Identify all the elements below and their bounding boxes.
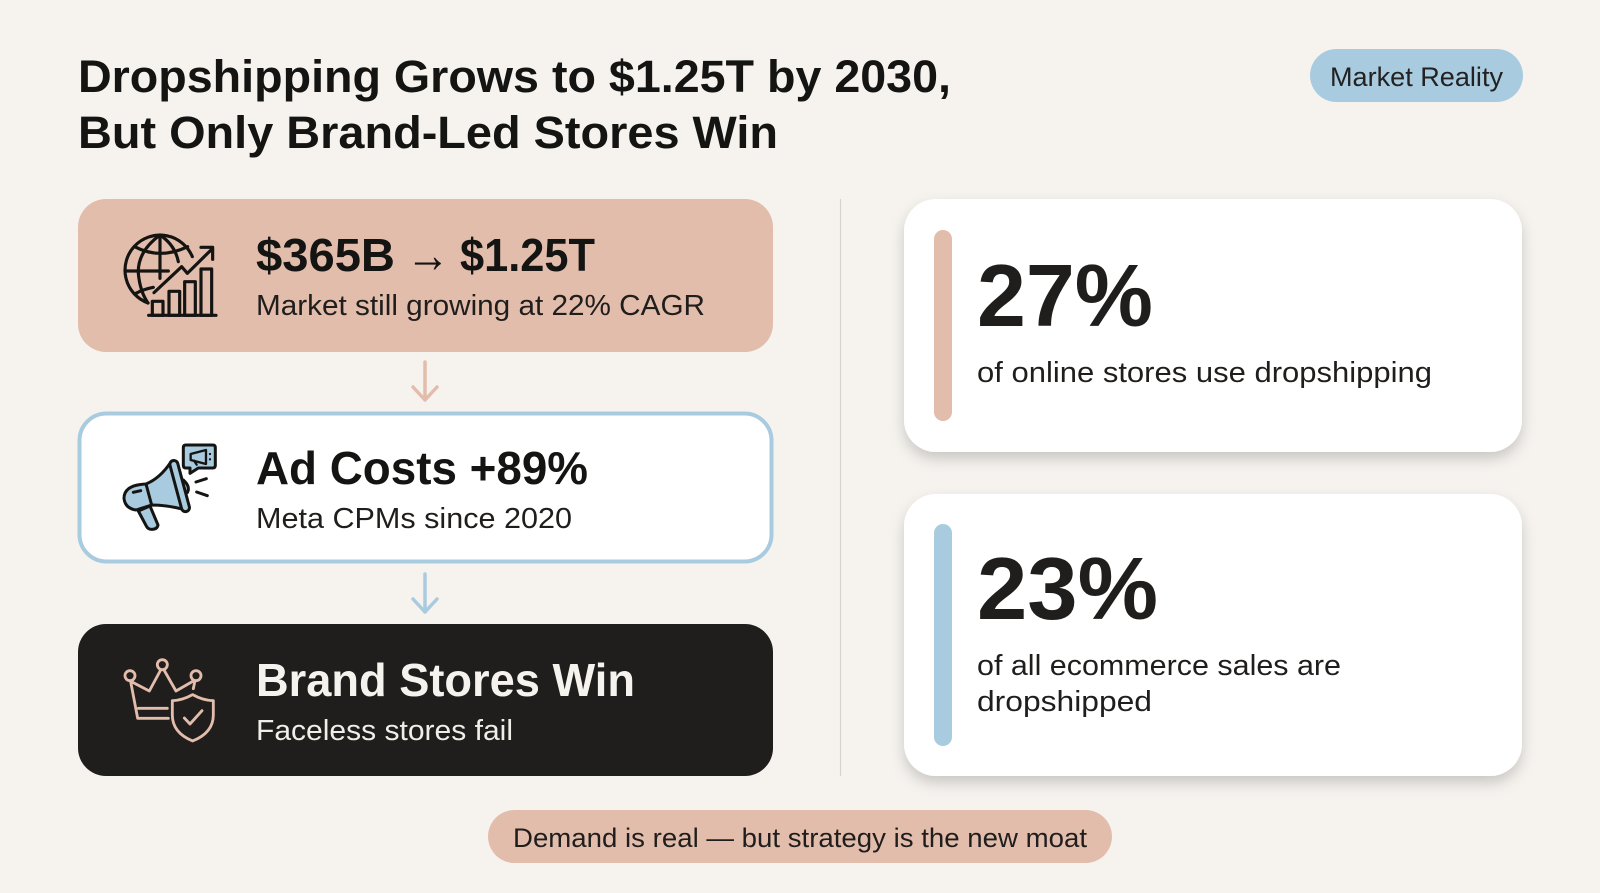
text: online stores: of online stores use dropshipping [977, 357, 1432, 389]
stat heading: market size [256, 227, 595, 283]
accent bar: peach [934, 230, 952, 421]
text: market CAGR: Market still growing at 22% CAGR [256, 290, 705, 322]
badge: market reality [1310, 49, 1523, 102]
stat heading: market size: $1.25T [460, 229, 595, 281]
arrow: blue down [413, 574, 437, 612]
stat heading: ad costs: Ad Costs +89% [256, 442, 588, 494]
icon: crown and shield [125, 660, 213, 741]
panel: market growth [78, 199, 773, 352]
text: faceless stores: Faceless stores fail [256, 715, 513, 747]
panel: brand stores win [78, 624, 773, 776]
panel: 23 percent stat [904, 494, 1522, 776]
stat number: 27%: 27% [977, 246, 1153, 345]
divider [840, 199, 842, 776]
stat heading: market size: → [406, 227, 450, 283]
stat heading: market size: $365B [256, 229, 395, 281]
icon: megaphone [124, 445, 215, 529]
callout: takeaway pill: Demand is real — but strategy is the new moat [513, 823, 1087, 853]
arrow: peach down [413, 362, 437, 400]
text: meta CPMs: Meta CPMs since 2020 [256, 503, 572, 535]
text: ecommerce sales: dropshipped [977, 686, 1152, 718]
title: Dropshipping Grows to $1.25T by 2030, [78, 51, 951, 102]
text: ecommerce sales: of all ecommerce sales are [977, 650, 1341, 682]
title: But Only Brand-Led Stores Win [78, 107, 778, 158]
panel: ad costs [80, 414, 772, 562]
accent bar: blue [934, 524, 952, 746]
callout: takeaway pill [488, 810, 1112, 863]
title [78, 51, 951, 158]
stat heading: brand stores: Brand Stores Win [256, 654, 635, 706]
badge: market reality: Market Reality [1330, 62, 1504, 92]
text: ecommerce sales [977, 650, 1341, 718]
panel: 27 percent stat [904, 199, 1522, 452]
stat number: 23%: 23% [977, 539, 1158, 638]
icon: globe with growth chart [125, 235, 216, 315]
